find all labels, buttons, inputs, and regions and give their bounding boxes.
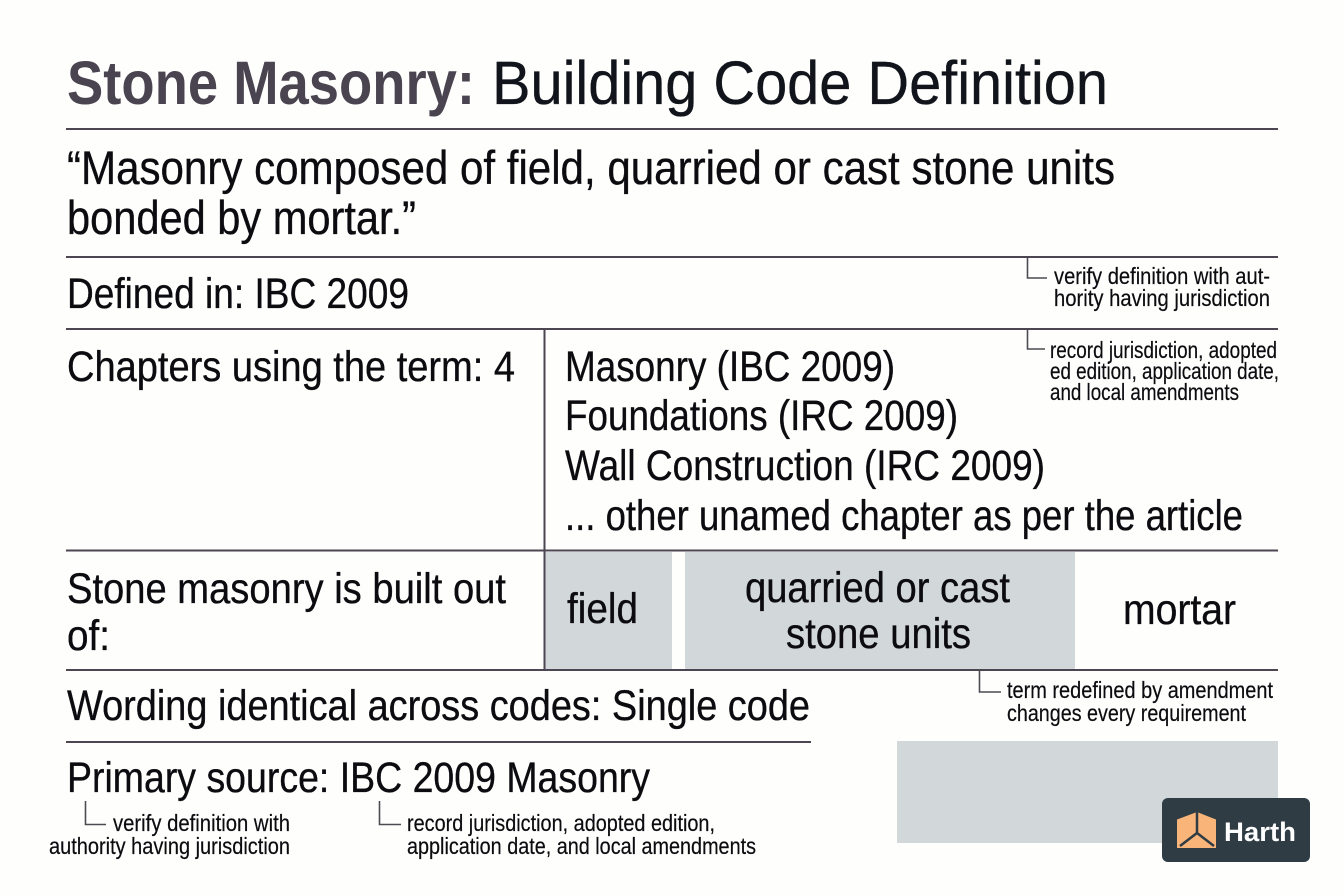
note: verify definition top right (1028, 258, 1270, 311)
note: verify definition top right: verify definition with aut- (1054, 263, 1270, 289)
note: term redefined: term redefined by amendment (1007, 677, 1274, 703)
defined in: Defined in: IBC 2009 (67, 270, 409, 318)
primary source: Primary source: IBC 2009 Masonry (67, 754, 650, 802)
built out of label (67, 565, 506, 660)
chapter list: Masonry (IBC 2009) (565, 343, 895, 391)
note: term redefined: changes every requirement (1007, 700, 1247, 726)
note: record jurisdiction top right (1028, 330, 1279, 405)
chapter list: ... other unamed chapter as per the article (565, 492, 1243, 540)
note: verify definition bottom: verify definition with (113, 810, 290, 836)
title (67, 49, 1108, 117)
logo: Harth: Harth (1224, 817, 1296, 847)
wording identical: Wording identical across codes: Single code (67, 682, 810, 730)
definition quote (67, 141, 1115, 244)
component: quarried or cast stone units (685, 552, 1075, 669)
note: term redefined (980, 671, 1274, 726)
logo: Harth (1162, 798, 1310, 862)
note: verify definition bottom (49, 801, 290, 859)
icon: orange cube (1177, 811, 1216, 848)
definition quote: bonded by mortar.” (67, 191, 416, 244)
title: Building Code Definition (492, 49, 1108, 117)
built out of label: of: (67, 612, 110, 660)
note: verify definition top right: hority having jurisdiction (1054, 285, 1270, 311)
note: record jurisdiction top right: record jurisdiction, adopted (1050, 337, 1277, 363)
chapter list: Wall Construction (IRC 2009) (565, 442, 1045, 490)
empty grey panel (897, 741, 1278, 843)
note: record jurisdiction top right: ed edition, application date, (1050, 358, 1279, 384)
definition quote: “Masonry composed of field, quarried or cast stone units (67, 141, 1115, 194)
chapter list: Foundations (IRC 2009) (565, 392, 958, 440)
note: record jurisdiction bottom (380, 801, 756, 859)
note: record jurisdiction bottom: application date, and local amendments (407, 833, 756, 859)
built out of label: Stone masonry is built out (67, 565, 506, 613)
title: Stone Masonry: (67, 49, 475, 117)
component: quarried or cast stone units: stone units (786, 610, 971, 658)
chapters using the term: Chapters using the term: 4 (67, 343, 515, 391)
note: record jurisdiction top right: and local amendments (1050, 379, 1239, 405)
chapter list (565, 343, 1243, 540)
note: verify definition bottom: authority having jurisdiction (49, 833, 290, 859)
component: field (546, 552, 672, 669)
component: field: field (567, 585, 638, 633)
note: record jurisdiction bottom: record jurisdiction, adopted edition, (407, 810, 715, 836)
component: mortar: mortar (1123, 586, 1236, 634)
component: quarried or cast stone units: quarried or cast (745, 564, 1010, 612)
